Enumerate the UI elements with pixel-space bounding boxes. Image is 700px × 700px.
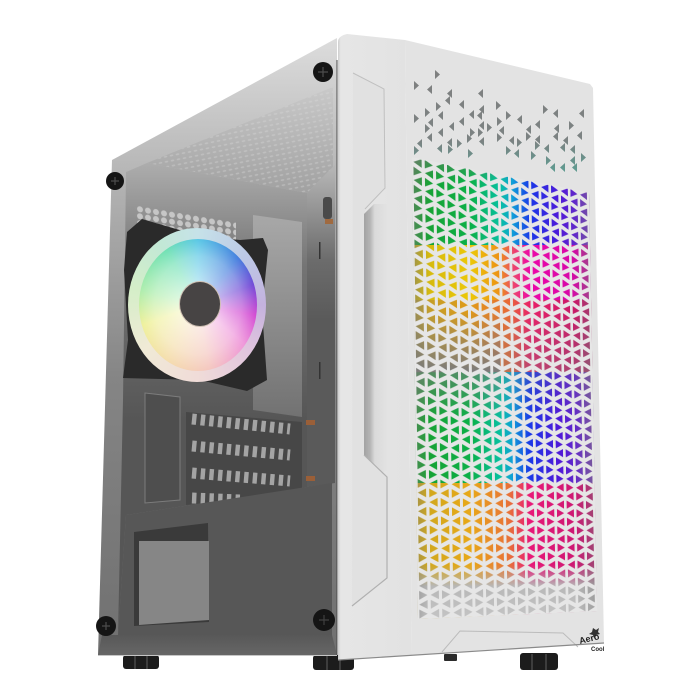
thumbscrew top right	[313, 62, 333, 82]
logo: Cool	[591, 647, 605, 653]
perforated vent above fan	[135, 205, 236, 250]
case bottom edge	[338, 643, 604, 660]
rainbow glow behind mesh	[412, 160, 597, 619]
front bezel side column	[338, 34, 412, 660]
sparse top perforations	[414, 70, 586, 172]
expansion slot bay	[145, 393, 302, 505]
fan glowing blades	[139, 239, 257, 371]
RGB fan	[128, 228, 266, 382]
front triangular mesh	[412, 158, 597, 619]
case body	[96, 34, 604, 670]
thumbscrew top left	[106, 172, 124, 190]
logo: Aero	[578, 631, 601, 646]
interior right column	[306, 165, 335, 487]
case floor strip	[98, 635, 337, 656]
interior back wall	[118, 163, 307, 635]
power supply shroud	[118, 483, 332, 635]
fan hub	[180, 282, 220, 326]
rubber feet	[123, 653, 558, 670]
logo	[578, 628, 605, 653]
front mesh face	[405, 40, 605, 655]
interior ceiling	[147, 87, 333, 193]
glass side panel	[98, 38, 337, 656]
PC case product image	[96, 34, 604, 670]
fan frame	[123, 219, 268, 391]
rectangular cutout behind fan	[253, 215, 302, 417]
bottom trapezoid ridge	[442, 631, 578, 652]
thumbscrew bottom right	[313, 609, 335, 631]
raised bezel accent	[352, 73, 388, 606]
thumbscrew bottom left	[96, 616, 116, 636]
power supply window	[134, 523, 209, 626]
